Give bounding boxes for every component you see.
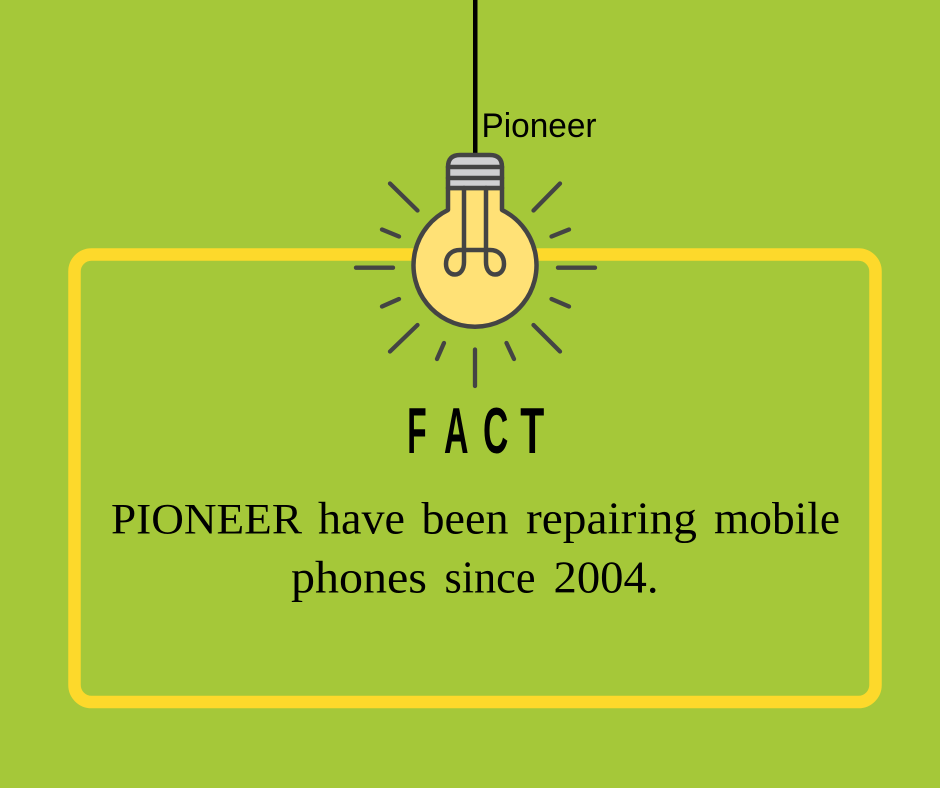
panel: yellow frame — [74, 254, 876, 702]
bulb glass — [414, 188, 537, 327]
body text: mobile — [714, 494, 840, 544]
cap thread lines — [448, 167, 502, 178]
body text: since — [444, 552, 536, 602]
heading: FACT: T — [520, 394, 544, 467]
heading: FACT: F — [407, 394, 427, 467]
heading: FACT: A — [444, 394, 468, 467]
body text: PIONEER — [111, 496, 302, 544]
body text: been — [422, 494, 508, 544]
heading: FACT: C — [483, 394, 508, 467]
heading: FACT — [407, 394, 544, 467]
body text: have — [318, 494, 405, 544]
body text: phones — [291, 552, 427, 602]
filament — [446, 188, 504, 274]
body text: repairing — [526, 494, 697, 544]
icon: light rays — [356, 184, 595, 386]
icon: hanging cord — [473, 0, 478, 156]
body text: 2004. — [554, 552, 658, 602]
bulb screw cap — [448, 155, 502, 188]
brand label: Pioneer — [482, 107, 596, 145]
body text — [111, 494, 840, 602]
icon: light bulb — [414, 155, 537, 327]
